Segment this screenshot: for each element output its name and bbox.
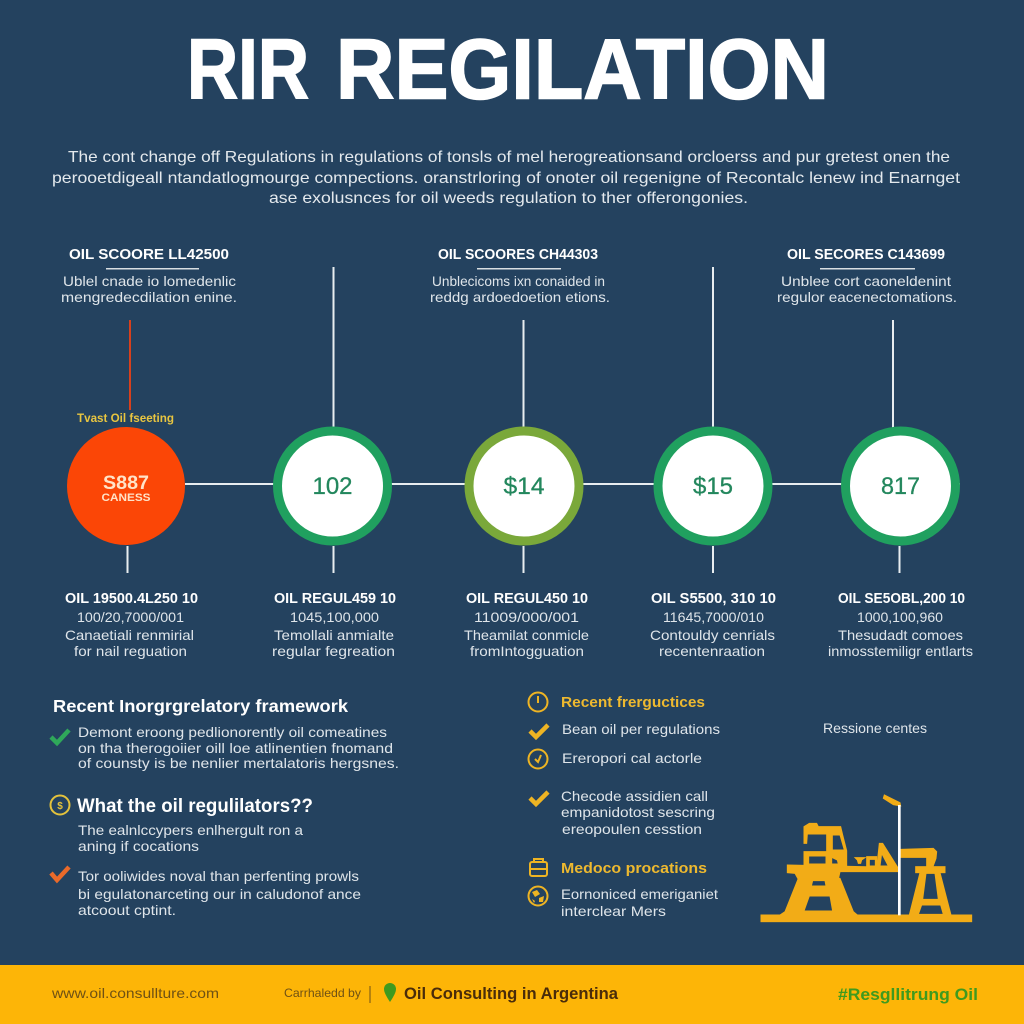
timeline connector lines [128,267,960,573]
practice item 3 [561,788,715,837]
node 1: orange circle [67,427,185,545]
footer bar [0,965,1024,1024]
practice item 3: empanidotost sescring [561,804,715,820]
icon: orange check [51,867,69,880]
yellow callout label: Tvast Oil fseeting [77,411,174,425]
regulators detail text: atcoout cptint. [78,902,176,918]
node 5: green circle [846,431,956,541]
intro text block [52,149,961,207]
node caption 2: OIL REGUL459 10 [274,591,396,607]
node caption 2 [272,591,396,659]
icon: check circle [528,750,548,768]
node caption 3: 11009/000/001 [474,609,579,625]
node caption 1: Canaetiali renmirial [65,627,194,643]
top label: column 5: Unblee cort caoneldenint [781,273,951,289]
node 1: orange circle: S887 [103,473,149,494]
icon: map pin [384,983,396,1002]
node caption 3: fromIntogguation [470,643,584,659]
top label: column 5: regulor eacenectomations. [777,289,957,305]
node caption 4: Contouldy cenrials [650,627,775,643]
practice item 3: Checode assidien call [561,788,708,804]
title: RIR [187,22,309,118]
practice item 2: Ereropori cal actorle [562,750,702,766]
top label: column 5 [777,247,957,305]
node caption 5: 1000,100,960 [857,609,943,625]
framework text: on tha therogoiier oill loe atlinentien fnomand [78,740,393,756]
title: REGILATION [336,22,829,118]
regulators detail text: bi egulatonarceting our in caludonof ance [78,886,361,902]
panel: what the oil regulators [50,796,361,918]
icon: yellow check [530,792,548,804]
top label: column 3: reddg ardoedoetion etions. [430,289,610,305]
medoco text: interclear Mers [561,903,666,919]
node caption 3: OIL REGUL450 10 [466,591,588,607]
icon: yellow coin [50,796,70,814]
framework text [78,724,399,771]
top label: column 1 [61,247,237,305]
node caption 1: OIL 19500.4L250 10 [65,591,198,607]
node 3: olive circle: $14 [504,473,544,500]
regulators detail text [78,868,361,918]
node caption 2: 1045,100,000 [290,609,379,625]
panel: medoco procations [528,859,718,919]
heading: framework: Recent Inorgrgrelatory framework [53,696,348,716]
framework text: of counsty is be nenlier mertalatoris hergsnes. [78,755,399,771]
top label: column 3 [430,247,610,305]
node 4: green circle [658,431,768,541]
node caption 5: Thesudadt comoes [838,627,963,643]
node caption 1 [65,591,198,659]
medoco text: Eornoniced emeriganiet [561,886,718,902]
heading: recent practices: Recent frerguctices [561,694,705,711]
node caption 2: Temollali anmialte [274,627,394,643]
node 5: green circle: 817 [881,473,920,500]
top label: column 1: Ublel cnade io lomedenlic [63,273,236,289]
panel: recent practices [528,692,720,837]
heading: medoco procations: Medoco procations [561,860,707,877]
heading: oil regulators: What the oil regulilators?? [77,796,313,817]
regulators text: aning if cocations [78,838,199,854]
regulators text: The ealnlccypers enlhergult ron a [78,822,303,838]
node caption 3 [464,591,589,659]
node caption 4: recentenraation [659,643,765,659]
top label: column 5: OIL SECORES C143699 [787,247,945,263]
node 4: green circle: $15 [693,473,733,500]
framework text: Demont eroong pedlionorently oil comeatines [78,724,387,740]
top label: column 3: OIL SCOORES CH44303 [438,247,598,263]
node caption 4 [650,591,776,659]
regulators detail text: Tor ooliwides noval than perfenting prowls [78,868,359,884]
icon: briefcase [530,859,547,876]
icon: oil rig machinery [761,795,972,922]
top label: column 3: Unblecicoms ixn conaided in [432,273,605,289]
icon: yellow check [530,725,548,737]
intro text block: ase exolusnces for oil weeds regulation to ther offerongonies. [269,190,748,207]
red marker line [129,320,131,410]
icon: alert circle [528,692,548,712]
node caption 4: OIL S5500, 310 10 [651,591,776,607]
node caption 1: for nail reguation [74,643,187,659]
regulators text [78,822,303,854]
node caption 1: 100/20,7000/001 [77,609,184,625]
intro text block: The cont change off Regulations in regulations of tonsls of mel herogreationsand orcloerss and pur gretest onen the [68,149,950,166]
node caption 5: inmosstemiligr entlarts [828,643,973,659]
footer website: www.oil.consullture.com [51,985,219,1001]
practice item 3: ereopoulen cesstion [562,821,702,837]
top label: column 1: OIL SCOORE LL42500 [69,247,229,263]
node 1: orange circle: CANESS [102,492,150,504]
node caption 5: OIL SE5OBL,200 10 [838,591,965,607]
top label: column 1: mengredecdilation enine. [61,289,237,305]
medoco text [561,886,718,919]
practice item 1: Bean oil per regulations [562,721,720,737]
icon: globe [528,886,548,906]
icon: yellow coin: $ [57,801,63,812]
icon: green check [51,730,69,743]
intro text block: perooetdigeall ntandatlogmourge compections. oranstrloring of onoter oil regenigne of Recontalc lenew ind Enarnget [52,170,961,187]
footer hashtag: #Resgllitrung Oil [838,986,978,1004]
node caption 3: Theamilat conmicle [464,627,589,643]
node caption 4: 11645,7000/010 [663,609,764,625]
footer company: Oil Consulting in Argentina [404,985,619,1003]
illustration caption: Ressione centes [823,720,927,736]
panel: regulatory framework [51,696,399,771]
node 2: green circle [278,431,388,541]
footer credit: Carrhaledd by [284,986,361,1000]
node caption 5 [828,591,973,659]
node caption 2: regular fegreation [272,643,395,659]
node 3: olive circle [469,431,579,541]
node 2: green circle: 102 [312,473,352,500]
